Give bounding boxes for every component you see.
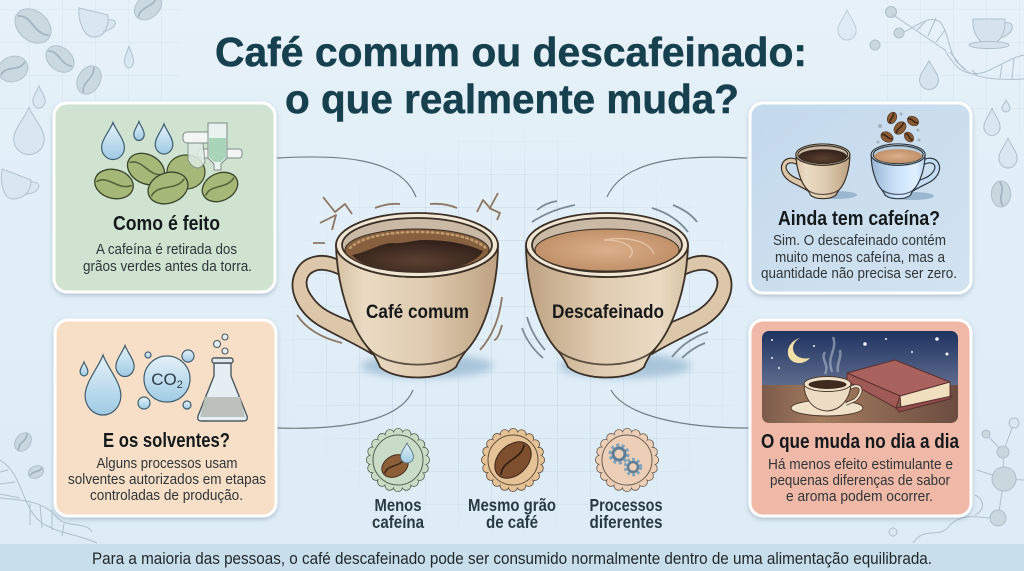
CO2 label: 2 <box>177 379 183 391</box>
coffee surface <box>345 229 489 272</box>
moon <box>788 338 810 363</box>
badge: processos diferentes <box>590 433 663 532</box>
description: Sim. O descafeinado contém <box>773 232 946 249</box>
title <box>215 29 807 122</box>
decorative beans, cups and drops top left <box>0 0 167 199</box>
flask <box>198 334 247 421</box>
footer bar <box>0 544 1024 571</box>
heading: O que muda no dia a dia <box>761 430 959 453</box>
coffee surface <box>535 229 679 271</box>
decorative DNA, cup and drops top right <box>838 6 1024 207</box>
icon: green beans, water drops and tube <box>92 122 243 209</box>
label: Café comum <box>366 302 469 323</box>
description <box>68 455 266 504</box>
steam <box>824 337 840 374</box>
label: de café <box>486 512 538 532</box>
decorative molecule network bottom right <box>889 418 1024 543</box>
badge: menos cafeína <box>371 433 425 532</box>
description: quantidade não precisa ser zero. <box>761 265 957 282</box>
connector lines <box>277 157 749 428</box>
description: grãos verdes antes da torra. <box>83 258 252 275</box>
heading: Como é feito <box>113 212 220 235</box>
panel: e os solventes <box>55 320 276 516</box>
icon: drops, CO2 bubble and flask <box>80 334 247 421</box>
description <box>768 456 953 505</box>
description: pequenas diferenças de sabor <box>770 472 950 489</box>
description: Há menos efeito estimulante e <box>768 456 953 473</box>
title: Café comum ou descafeinado: <box>215 29 807 75</box>
panel: o que muda no dia a dia <box>750 320 971 516</box>
description: controladas de produção. <box>90 487 243 504</box>
description: e aroma podem ocorrer. <box>786 488 933 505</box>
description: solventes autorizados em etapas <box>68 471 266 488</box>
icon: scalloped badge with gears <box>600 433 654 487</box>
label: Processos <box>590 495 663 515</box>
title: o que realmente muda? <box>285 76 739 122</box>
icon: regular and decaf cups with beans <box>781 111 940 200</box>
badge: mesmo grão de café <box>468 433 556 532</box>
label: Descafeinado <box>552 302 664 323</box>
book <box>847 360 952 412</box>
label <box>372 495 424 532</box>
description: A cafeína é retirada dos <box>96 241 237 258</box>
cup: descafeinado <box>522 201 731 378</box>
footer bar: Para a maioria das pessoas, o café descafeinado pode ser consumido normalmente dentro de uma alimentação equilibrada. <box>92 549 932 568</box>
label: diferentes <box>590 512 663 532</box>
decorative DNA and beans bottom left <box>0 430 97 543</box>
label <box>590 495 663 532</box>
description: Alguns processos usam <box>96 455 238 472</box>
description: muito menos cafeína, mas a <box>775 249 946 266</box>
CO2 label: CO <box>151 370 177 389</box>
description <box>83 241 252 275</box>
energy strokes <box>297 193 502 350</box>
heading: Ainda tem cafeína? <box>778 207 940 230</box>
icon: scalloped badge with bean <box>486 433 540 487</box>
label: cafeína <box>372 512 424 532</box>
label: Mesmo grão <box>468 495 556 515</box>
stars <box>771 337 948 369</box>
label <box>468 495 556 532</box>
panel: como é feito <box>54 103 275 292</box>
panel: ainda tem cafeína <box>750 103 971 293</box>
saucer and cup <box>791 400 863 416</box>
illustration: night scene with coffee and book <box>762 331 958 423</box>
cup: café comum <box>293 193 502 378</box>
heading: E os solventes? <box>103 429 230 452</box>
motion strokes <box>522 201 708 358</box>
description <box>761 232 957 282</box>
label: Menos <box>374 495 422 515</box>
icon: scalloped badge with bean and drop <box>371 433 425 487</box>
